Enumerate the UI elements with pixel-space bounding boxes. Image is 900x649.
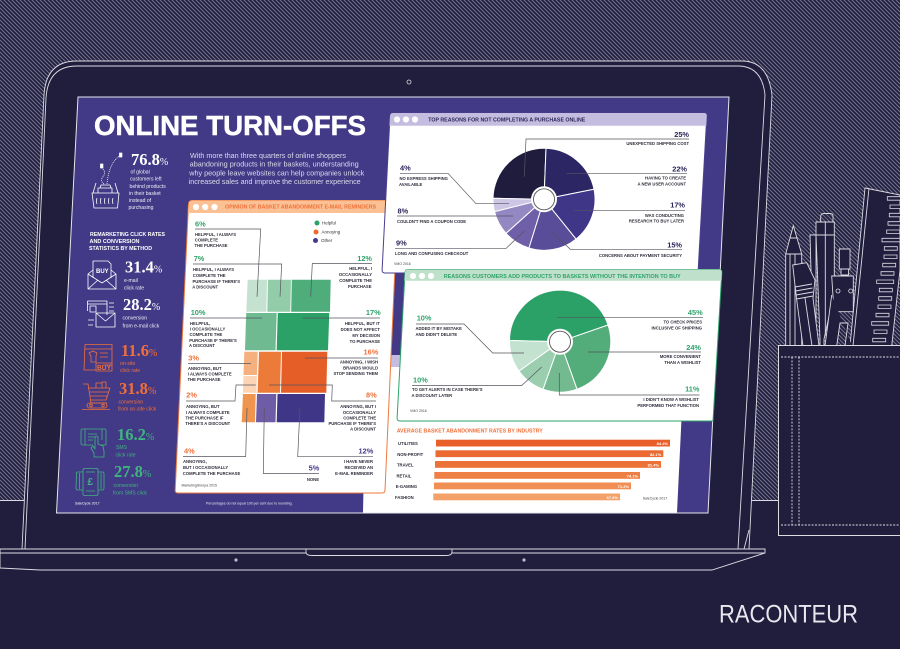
callout: 9%: 9%: [396, 239, 407, 248]
window: bar chart panel: [363, 355, 684, 512]
mosaic chart: [242, 280, 331, 422]
callout: 10%: 10%: [191, 308, 206, 317]
callout: 16%: 16%: [364, 348, 379, 356]
callout: 8%: [269, 385, 377, 432]
compass: [825, 249, 853, 346]
callout: 4%: AVAILABLE: [399, 182, 423, 187]
callout: 11%: I DIDN'T KNOW A WISHLIST: [643, 397, 699, 402]
callout: 22%: 22%: [672, 165, 687, 174]
callout: 17%: HELPFUL, BUT IT: [345, 321, 380, 326]
callout: 8%: [397, 207, 513, 224]
callout: 24%: MORE CONVENIENT: [660, 354, 701, 359]
callout: 4%: 4%: [400, 164, 411, 173]
stat: 76.8% of global customers: purchasing: [128, 205, 154, 211]
callout: 6%: HELPFUL, I ALWAYS: [195, 232, 236, 237]
callout: 8%: 8%: [366, 391, 377, 400]
window buttons: [394, 116, 418, 123]
callout: 7%: HELPFUL, I ALWAYS: [193, 267, 234, 272]
callout: 12% never: I HAVE NEVER: [344, 459, 373, 464]
callout: 6%: COMPLETE: [195, 238, 218, 242]
stat: 27.8% conversion sms: from SMS click: [113, 491, 147, 497]
callout: 6%: THE PURCHASE: [194, 243, 228, 248]
legend: [313, 220, 341, 243]
icon: shopping cart: [82, 382, 110, 410]
callout: 6%: [194, 220, 261, 297]
bar chart: NON-PROFIT: [397, 452, 424, 457]
icon: email conversion: [88, 301, 115, 327]
callout: 2%: THERE'S A DISCOUNT: [185, 421, 231, 426]
stat: 27.8% conversion sms: conversion: [114, 483, 138, 489]
callout: 2%: 2%: [186, 391, 197, 400]
callout: 24%: THAN A WISHLIST: [664, 360, 701, 365]
callout: 3%: [188, 354, 251, 382]
intro text: With more than three quarters of online shoppers: [190, 151, 346, 160]
callout: 45%: INCLUSIVE OF SHIPPING: [652, 325, 702, 330]
stat: 31.4% e-mail click rate: 31.4%: [125, 258, 162, 277]
icon: sms pound phone: [76, 468, 104, 496]
pencil holder: [778, 346, 900, 536]
panel heading: REASONS CUSTOMERS ADD PRODUCTS TO BASKETS WITHOUT THE INTENTION TO BUY: [444, 274, 681, 280]
callout: 8%: PURCHASE IF THERE'S: [328, 421, 376, 426]
stat: 27.8% conversion sms: 27.8%: [114, 462, 151, 481]
callout: 12% never: E-MAIL REMINDER: [335, 471, 373, 476]
callout: 12% never: RECEIVED AN: [345, 465, 373, 470]
laptop: [0, 61, 772, 570]
stat: 76.8% of global customers: behind products: [130, 184, 166, 190]
stat: 11.6% on-site click rate: [120, 341, 157, 374]
subheading: remarketing: AND CONVERSION: [90, 239, 140, 245]
callout: 3%: ANNOYING, BUT: [188, 366, 222, 371]
callout: 25%: [524, 130, 689, 177]
panel heading: OPINION OF BASKET ABANDONMENT E-MAIL REMINDERS: [225, 205, 376, 211]
stat: 76.8% of global customers: in their basket: [129, 191, 161, 197]
bar chart: 84.4%: [657, 441, 668, 446]
callout: 17%: 17%: [366, 308, 381, 317]
stat: 76.8% of global customers: [128, 150, 168, 211]
stat: 28.2% conversion from e-mail: [122, 295, 160, 330]
callout: 8%: ANNOYING, BUT I: [340, 404, 376, 409]
callout: 4%: NO EXPRESS SHIPPING: [400, 176, 448, 181]
stat: 16.2% sms click rate: 16.2%: [117, 425, 154, 444]
bar chart: FASHION: [395, 495, 414, 500]
stat: 16.2% sms click rate: SMS: [116, 445, 128, 451]
logo: Raconteur: RACONTEUR: [719, 600, 858, 628]
stat: 11.6% on-site click rate: on-site: [120, 361, 135, 367]
callout: 24%: [588, 343, 701, 365]
icon: basket: [92, 153, 122, 208]
callout: 10% alerts: 10%: [413, 375, 428, 384]
callout: 12% occasionally: HELPFUL, I: [349, 266, 372, 271]
intro text: abandoning products in their baskets, understanding: [190, 160, 359, 169]
callout: 10%: A DISCOUNT: [189, 343, 215, 348]
icon: email buy: [88, 261, 116, 289]
icon: sms pound phone: £: [88, 477, 94, 488]
callout: 4%: COMPLETE THE PURCHASE: [183, 471, 240, 476]
stat: 31.8% conversion on-site: conversion: [118, 399, 143, 405]
callout: 22%: HAVING TO CREATE: [645, 176, 686, 180]
callout: 10% alerts: [412, 367, 542, 398]
callout: 45%: TO CHECK PRICES: [663, 320, 702, 324]
callout: 7%: A DISCOUNT: [192, 284, 219, 290]
source: MarketingSherpa 2015: [182, 484, 217, 488]
callout: 10% alerts: A DISCOUNT LATER: [412, 393, 452, 398]
callout: 2%: ANNOYING, BUT: [186, 404, 220, 409]
callout: 7%: [192, 254, 282, 297]
icon: email buy: BUY: [96, 269, 109, 275]
bar chart: E-GAMING: [396, 484, 417, 489]
callout: 5%: 5%: [309, 464, 320, 473]
callout: 17%: DOES NOT AFFECT: [341, 327, 380, 332]
callout: 10%: HELPFUL,: [190, 321, 210, 326]
panel: top reasons: [382, 113, 707, 273]
laptop lid: [22, 61, 772, 549]
bar chart: 67.6%: [607, 495, 618, 500]
source: SaleCycle 2017: [643, 496, 667, 500]
callout: 12% never: 12%: [359, 447, 374, 456]
callout: 10% mistake: 10%: [417, 314, 432, 323]
callout: 4%: [183, 408, 247, 476]
bar chart: TRAVEL: [397, 462, 414, 468]
pie chart: [509, 290, 611, 392]
callout: 22%: [567, 165, 687, 186]
window buttons: [410, 273, 434, 279]
desk items: pencils and ruler: [786, 188, 900, 346]
bar chart: 82.1%: [650, 452, 662, 457]
bar chart: UTILITIES: [398, 441, 418, 446]
callout: 8%: 8%: [398, 207, 409, 216]
panel: reasons to add to basket: [397, 270, 722, 421]
callout: 17%: [574, 201, 685, 224]
callout: 16%: [305, 348, 379, 376]
callout: 7%: COMPLETE THE: [193, 273, 226, 278]
callout: 8%: A DISCOUNT: [350, 426, 376, 432]
stat: 27.8% conversion sms: [113, 462, 151, 497]
callout: 15%: 15%: [667, 240, 682, 249]
bar chart: 81.4%: [648, 462, 659, 468]
callout: 12% occasionally: 12%: [357, 254, 372, 263]
laptop base: [0, 549, 765, 570]
callout: 9%: LONG AND CONFUSING CHECKOUT: [395, 251, 469, 256]
laptop notch: [306, 550, 452, 556]
callout: 7%: PURCHASE IF THERE'S: [192, 279, 240, 284]
callout: 10% mistake: [416, 314, 524, 353]
stat: 28.2% conversion from e-mail: conversion: [122, 316, 147, 322]
stat: 31.4% e-mail click rate: e-mail: [124, 278, 138, 284]
callout: 11%: [559, 373, 700, 408]
stat: 76.8% of global customers: 76.8%: [131, 150, 168, 169]
screen: [56, 97, 729, 513]
callout: 17%: [303, 308, 381, 344]
bar chart: RETAIL: [396, 474, 412, 478]
callout: 8%: COMPLETE THE: [343, 416, 376, 420]
callout: 11%: 11%: [685, 385, 700, 394]
window buttons: [193, 204, 218, 210]
callout: 2%: THE PURCHASE IF: [186, 416, 224, 420]
callout: 5%: NONE: [307, 477, 319, 482]
stat: 31.8% conversion on-site: [118, 379, 157, 413]
callout: 3%: 3%: [188, 354, 199, 363]
pencil: [786, 226, 802, 346]
callout: 17%: RESEARCH TO BUY LATER: [629, 218, 684, 224]
callout: 10%: COMPLETE THE: [190, 332, 223, 337]
callout: 10% alerts: TO GET ALERTS IN CASE THERE'S: [412, 387, 483, 392]
stat: 28.2% conversion from e-mail: 28.2%: [123, 295, 160, 314]
stat: 76.8% of global customers: of global: [130, 170, 150, 176]
callout: 16%: ANNOYING, I WISH: [340, 360, 378, 365]
panel: email reminders: [175, 200, 398, 493]
legend: Other: [321, 238, 333, 243]
panel heading: TOP REASONS FOR NOT COMPLETING A PURCHASE ONLINE: [428, 117, 585, 123]
callout: 17%: 17%: [670, 201, 685, 210]
callout: 8%: COULDN'T FIND A COUPON CODE: [397, 219, 466, 224]
callout: 10%: I OCCASIONALLY: [190, 326, 225, 332]
callout: 45%: [557, 308, 703, 330]
callout: 3%: THE PURCHASE: [188, 377, 221, 382]
callout: 4%: BUT I OCCASIONALLY: [183, 465, 228, 470]
icon: on-site browser: [84, 344, 112, 372]
callout: 11%: PERFORMED THAT FUNCTION: [637, 403, 699, 408]
stat: 31.4% e-mail click rate: [124, 258, 162, 291]
callout: 17%: TO PURCHASE: [350, 339, 380, 344]
callout: 4%: ANNOYING,: [183, 459, 207, 464]
stat: 11.6% on-site click rate: click rate: [120, 368, 140, 374]
callout: 8%: OCCASIONALLY: [343, 410, 376, 415]
callout: 12% occasionally: [311, 254, 372, 297]
legend: Annoying: [322, 230, 341, 235]
callout: 10% mistake: AND DIDN'T DELETE: [416, 332, 457, 337]
footnote: Percentages do not equal 100 per cent due to rounding.: [206, 502, 293, 506]
callout: 15%: [551, 231, 682, 258]
stat: 28.2% conversion from e-mail: from e-mail click: [122, 324, 160, 330]
stat: 76.8% of global customers: instead of: [129, 198, 152, 204]
callout: 5%: [263, 408, 320, 482]
callout: 10%: PURCHASE IF THERE'S: [189, 338, 237, 343]
callout: 10%: [189, 308, 262, 348]
callout: 4%: 4%: [184, 447, 195, 456]
callout: 45%: 45%: [688, 308, 703, 317]
intro text: increased sales and improve the customer experience: [189, 177, 361, 186]
intro text: why people leave websites can help companies unlock: [188, 168, 365, 178]
callout: 2%: I ALWAYS COMPLETE: [186, 410, 230, 415]
camera: [407, 80, 411, 84]
title: ONLINE TURN-OFFS: [94, 110, 366, 141]
callout: 2%: [185, 385, 256, 426]
source: VMO 2016: [410, 409, 427, 413]
pie chart: [493, 148, 595, 250]
callout: 25%: 25%: [674, 130, 689, 139]
legend: Helpful: [322, 221, 336, 226]
source: salecycle: SaleCycle 2017: [75, 502, 100, 506]
callout: 17%: MY DECISION: [352, 333, 380, 338]
callout: 16%: BRANDS WOULD: [343, 366, 378, 370]
callout: 24%: 24%: [686, 343, 701, 352]
bar chart: 74.1%: [627, 474, 638, 478]
pen: [810, 214, 834, 346]
callout: 12% occasionally: OCCASIONALLY: [339, 272, 372, 277]
callout: 12% occasionally: COMPLETE THE: [339, 278, 372, 283]
callout: 12% occasionally: PURCHASE: [348, 284, 372, 289]
subheading: remarketing: REMARKETING CLICK RATES: [90, 232, 165, 238]
source: VMO 2016: [394, 262, 411, 266]
stat: 16.2% sms click rate: click rate: [116, 452, 136, 458]
callout: 22%: A NEW USER ACCOUNT: [637, 182, 686, 186]
icon: sms phone and hand: [81, 429, 106, 457]
stat: 11.6% on-site click rate: 11.6%: [121, 341, 157, 360]
callout: 17%: WAS CONDUCTING: [645, 213, 684, 218]
callout: 10% mistake: ADDED IT BY MISTAKE: [416, 326, 462, 331]
intro text: [188, 151, 365, 186]
marker: [793, 263, 819, 346]
callout: 6%: 6%: [195, 220, 206, 229]
callout: 3%: I ALWAYS COMPLETE: [188, 372, 232, 376]
stat: 31.8% conversion on-site: 31.8%: [119, 379, 156, 398]
callout: 16%: STOP SENDING THEM: [333, 371, 378, 376]
stat: 31.8% conversion on-site: from on-site click: [118, 407, 157, 413]
subheading: remarketing: STATISTICS BY METHOD: [89, 246, 152, 252]
stat: 76.8% of global customers: customers left: [130, 177, 162, 183]
callout: 25%: UNEXPECTED SHIPPING COST: [626, 141, 689, 146]
ruler: [850, 188, 900, 346]
stat: 31.4% e-mail click rate: click rate: [124, 285, 144, 291]
callout: 7%: 7%: [194, 254, 205, 263]
stat: 16.2% sms click rate: [116, 425, 154, 458]
callout: 15%: CONCERNS ABOUT PAYMENT SECURITY: [599, 253, 682, 258]
callout: 12% never: [298, 408, 374, 476]
callout: 9%: [395, 231, 524, 256]
icon: on-site browser: BUY: [97, 365, 111, 372]
bar chart: 71.2%: [618, 484, 629, 489]
bar chart heading: AVERAGE BASKET ABANDONMENT RATES BY INDUSTRY: [397, 429, 543, 435]
subheading: remarketing: [89, 232, 165, 252]
callout: 4%: [399, 164, 509, 204]
bar chart: [395, 440, 670, 500]
